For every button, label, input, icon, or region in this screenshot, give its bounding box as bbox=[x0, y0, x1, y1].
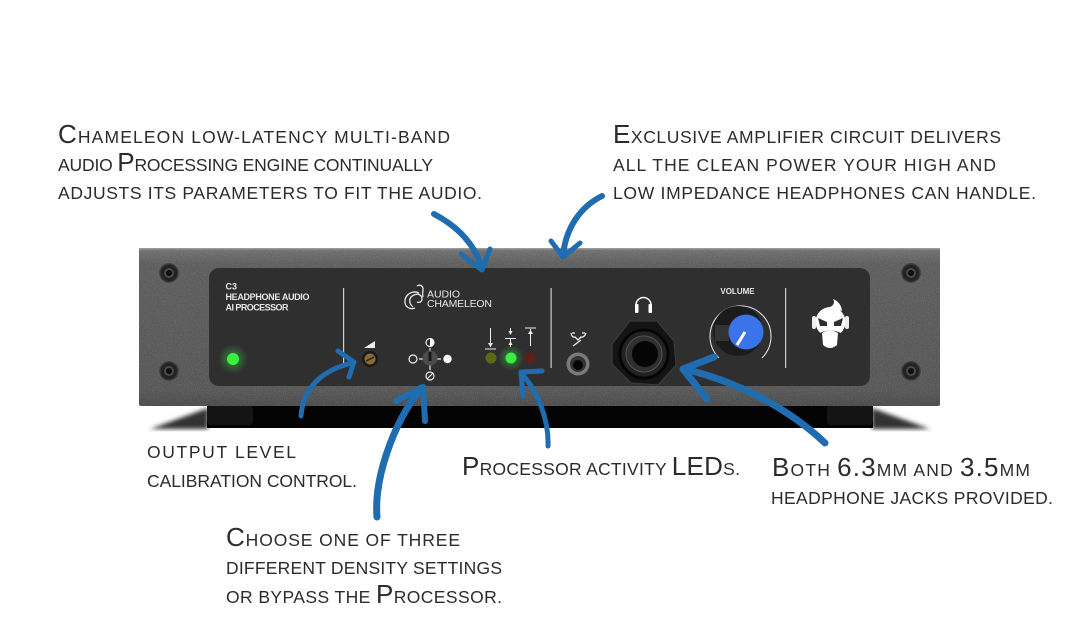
callout: processing engine: ADJUSTS ITS PARAMETERS TO FIT THE AUDIO. bbox=[58, 183, 482, 203]
callout: output level bbox=[147, 442, 357, 491]
callout: output level: CALIBRATION CONTROL. bbox=[147, 471, 357, 491]
headphone icon bbox=[635, 298, 652, 313]
callout: processing engine: CHAMELEON LOW-LATENCY MULTI-BAND bbox=[58, 119, 450, 149]
callout: density settings: DIFFERENT DENSITY SETTINGS bbox=[226, 558, 502, 578]
processor activity LEDs bbox=[485, 328, 536, 371]
arrow: to activity LEDs bbox=[521, 371, 548, 446]
logo bbox=[405, 285, 492, 310]
mounting screws bbox=[160, 264, 920, 380]
callout: output level: OUTPUT LEVEL bbox=[147, 442, 296, 462]
logo: CHAMELEON bbox=[427, 298, 492, 310]
callout: amplifier circuit: LOW IMPEDANCE HEADPHONES CAN HANDLE. bbox=[613, 183, 1036, 203]
callout: activity LEDs: PROCESSOR ACTIVITY LEDS. bbox=[462, 451, 740, 481]
chassis bbox=[139, 248, 940, 406]
model label: HEADPHONE AUDIO bbox=[226, 292, 310, 302]
arrow: to calibration control bbox=[301, 351, 354, 416]
callout: density settings: CHOOSE ONE OF THREE bbox=[226, 522, 460, 552]
3.5mm jack and icon bbox=[566, 333, 590, 376]
callout: headphone jacks bbox=[771, 452, 1053, 508]
arrow: to amplifier circuit bbox=[551, 196, 602, 257]
panel dividers bbox=[343, 288, 786, 368]
6.3mm jack bbox=[612, 321, 676, 385]
density selector switch bbox=[409, 338, 452, 380]
callout: density settings: OR BYPASS THE PROCESSOR. bbox=[226, 579, 502, 609]
power LED bbox=[218, 344, 248, 374]
shadow and feet bbox=[150, 405, 930, 429]
callout: processing engine bbox=[58, 119, 482, 203]
callout: headphone jacks: HEADPHONE JACKS PROVIDED. bbox=[771, 488, 1053, 508]
arrow: to processing engine bbox=[434, 214, 490, 270]
mascot logo bbox=[812, 299, 849, 348]
logo: AUDIO bbox=[427, 288, 460, 300]
volume knob: VOLUME bbox=[720, 287, 755, 296]
arrow: to headphone jacks bbox=[683, 357, 825, 443]
callout: processing engine: AUDIO PROCESSING ENGINE CONTINUALLY bbox=[58, 147, 433, 177]
calibration trim control bbox=[362, 341, 378, 367]
audio processor device bbox=[139, 248, 940, 429]
volume knob bbox=[710, 287, 771, 358]
callout: amplifier circuit bbox=[613, 119, 1036, 203]
model label: C3 bbox=[226, 282, 237, 292]
front panel bbox=[209, 268, 870, 386]
arrow: to density selector bbox=[377, 387, 425, 517]
callout: density settings bbox=[226, 522, 502, 609]
model label: AI PROCESSOR bbox=[226, 302, 289, 312]
callout: amplifier circuit: EXCLUSIVE AMPLIFIER CIRCUIT DELIVERS bbox=[613, 119, 1001, 149]
callout: amplifier circuit: ALL THE CLEAN POWER YOUR HIGH AND bbox=[613, 155, 996, 175]
callout: headphone jacks: BOTH 6.3MM AND 3.5MM bbox=[772, 452, 1030, 482]
